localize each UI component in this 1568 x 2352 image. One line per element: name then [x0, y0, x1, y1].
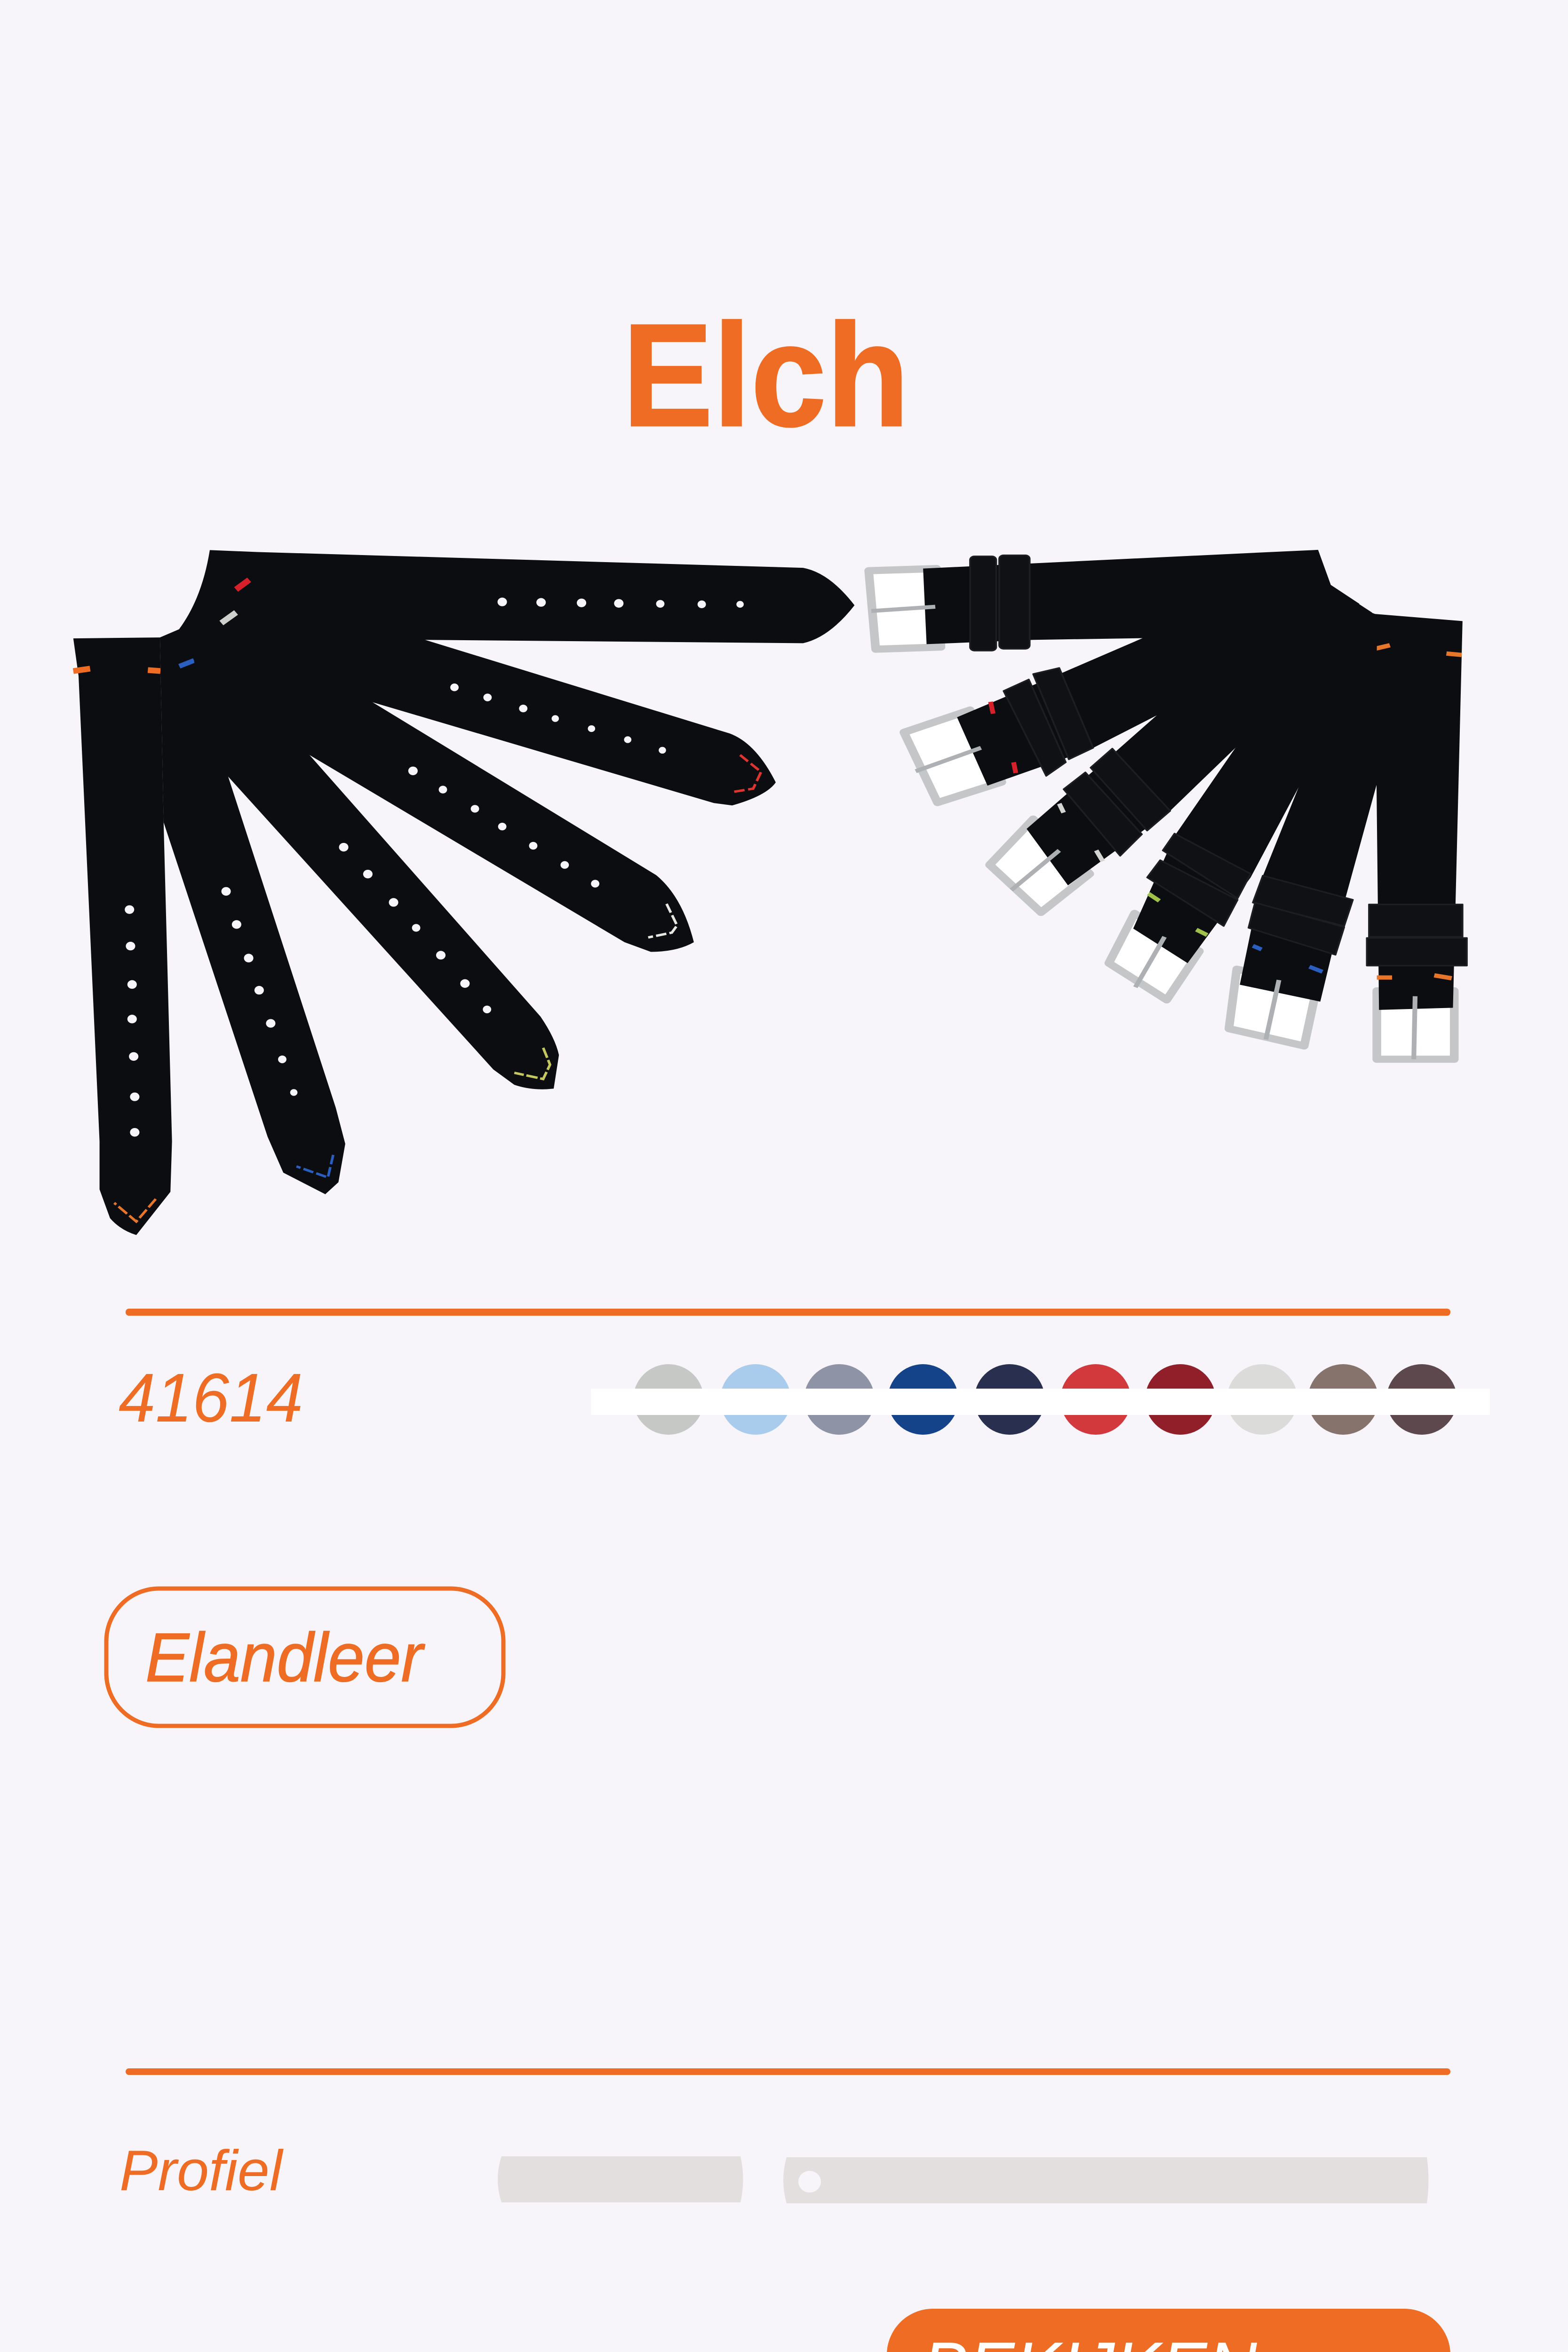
material pill: Elandleer: [106, 1589, 503, 1726]
material pill: Elandleer: Elandleer: [145, 1619, 425, 1696]
photo: fan of straps with buckles: [869, 550, 1467, 1059]
strap 2: red stitching: [178, 596, 776, 805]
buckle strap 1: [869, 550, 1372, 651]
buckle strap 5: [1229, 611, 1377, 1046]
buckle strap 3: [990, 575, 1360, 913]
profile label: Profiel: [119, 2138, 284, 2202]
strap 1: top horizontal: [178, 550, 854, 643]
profile shape: short bar: [498, 2156, 743, 2202]
white band across swatches: [591, 1389, 1490, 1415]
buckle strap 6: [1367, 614, 1467, 1059]
top divider line: [126, 1309, 1450, 1316]
strap 5: blue stitching: [160, 620, 345, 1194]
photo: fan of straps with holes: [73, 550, 854, 1235]
article number: 41614: [119, 1359, 303, 1437]
profile shape: long bar with hole: [783, 2157, 1428, 2203]
buckle strap 2: [904, 564, 1331, 803]
strap 3: white stitching: [178, 609, 694, 952]
button: BEKIJKEN: [887, 2309, 1450, 2352]
colour swatches: [633, 1364, 1457, 1435]
bottom divider line: [126, 2068, 1450, 2075]
title: Elch: [622, 293, 909, 457]
strap 6: orange stitching: [73, 637, 172, 1235]
buckle strap 4: [1109, 600, 1377, 1000]
strap 4: green stitching: [194, 633, 559, 1089]
